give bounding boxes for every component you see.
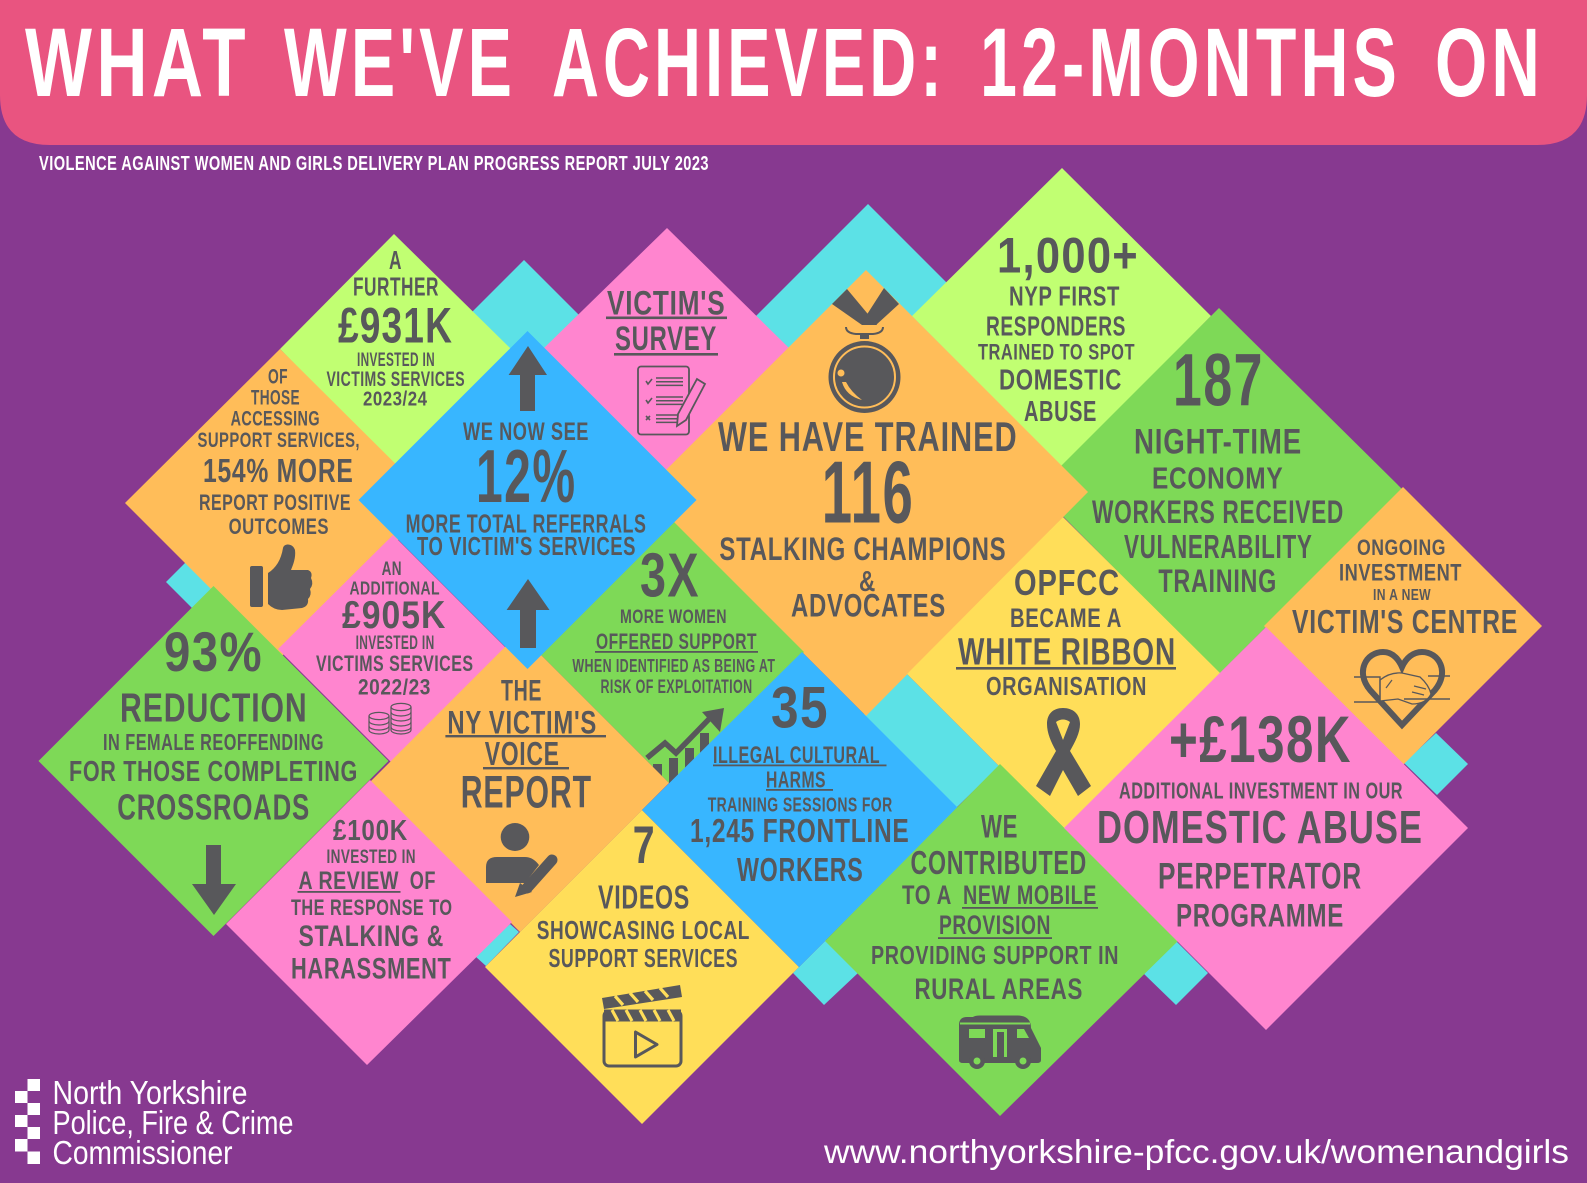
panel: new mobile provision: WE [981, 808, 1018, 844]
panel: 3X more women offered support [540, 521, 804, 788]
panel: 187 night-time economy workers: TRAINING [1158, 563, 1277, 599]
panel: 187 night-time economy workers: 187 [1173, 339, 1264, 422]
panel: 12% more total referrals: 12% [476, 434, 576, 518]
icon: rising chart [647, 708, 724, 788]
panel: new victim's centre: INVESTMENT [1339, 560, 1462, 587]
panel: new mobile provision: PROVISION [939, 910, 1051, 940]
icon: campervan [959, 1016, 1041, 1069]
panel: 1,000+ first responders: RESPONDERS [986, 311, 1126, 342]
panel: 116 stalking champions: & [859, 566, 876, 598]
panel: 100K stalking review: OF [410, 867, 436, 895]
icon: clipboard survey [638, 366, 705, 434]
panel: +138K domestic abuse programme [1064, 627, 1468, 1030]
logo: North Yorkshire PFCC [15, 1074, 294, 1171]
icon: awareness ribbon [1036, 708, 1091, 796]
panel: 12% more total referrals: MORE TOTAL REFERRALS [406, 509, 646, 539]
panel: further 931K investment: INVESTED IN [357, 350, 435, 371]
panel: NY victim's voice report [370, 633, 669, 932]
panel: 116 stalking champions: ADVOCATES [791, 588, 946, 624]
title banner: 12-MONTHS [980, 8, 1401, 117]
panel: 116 stalking champions: STALKING CHAMPIONS [719, 531, 1006, 567]
panel: 154% more positive outcomes [125, 349, 435, 658]
title banner: WE'VE [284, 8, 516, 117]
panel: further 931K investment: FURTHER [353, 272, 439, 302]
icon: thumbs up [250, 544, 312, 610]
panel: 187 night-time economy workers: NIGHT-TIME [1134, 422, 1302, 462]
icon: medal [828, 288, 900, 413]
panel: 187 night-time economy workers: VULNERABILITY [1124, 528, 1312, 565]
panel: 3X more women offered support: OFFERED SUPPORT [596, 629, 757, 654]
arrow: down [192, 845, 236, 915]
panel: +138K domestic abuse programme: DOMESTIC ABUSE [1097, 801, 1423, 853]
panel: 93% reduction in reoffending [38, 586, 388, 936]
panel: NY victim's voice report: THE [501, 674, 542, 708]
logo: North Yorkshire PFCC: Police, Fire & Crime [52, 1104, 294, 1141]
panel: 187 night-time economy workers [1037, 308, 1403, 674]
panel: 100K stalking review: STALKING & [298, 920, 444, 953]
panel: 3X more women offered support: 3X [640, 542, 700, 610]
panel: further 931K investment: 2023/24 [363, 389, 428, 411]
panel: white ribbon organisation: OPFCC [1014, 562, 1120, 603]
panel: further 931K investment: A [389, 245, 402, 275]
panel: white ribbon organisation: ORGANISATION [986, 671, 1147, 701]
panel: 35 illegal cultural harms: TRAINING SESSIONS FOR [708, 794, 893, 816]
panel: 1,000+ first responders: TRAINED TO SPOT [978, 340, 1135, 365]
panel: 187 night-time economy workers: WORKERS RECEIVED [1092, 494, 1344, 530]
panel: 3X more women offered support: WHEN IDENTIFIED AS BEING AT [572, 655, 775, 676]
panel: white ribbon organisation: BECAME A [1010, 603, 1122, 633]
panel: new mobile provision: CONTRIBUTED [910, 844, 1087, 881]
panel: 7 videos: SHOWCASING LOCAL [537, 915, 750, 945]
panel: +138K domestic abuse programme: PERPETRATOR [1158, 855, 1362, 896]
panel: 905K additional investment: INVESTED IN [356, 633, 435, 654]
panel: NY victim's voice report: REPORT [461, 767, 592, 818]
title banner [0, 0, 1587, 145]
panel: 154% more positive outcomes: THOSE [251, 386, 300, 410]
panel: 100K stalking review [226, 780, 512, 1065]
panel: 1,000+ first responders: DOMESTIC [999, 365, 1122, 397]
panel: 7 videos: SUPPORT SERVICES [548, 943, 738, 973]
panel: 93% reduction in reoffending: IN FEMALE REOFFENDING [103, 729, 324, 755]
panel: 116 stalking champions [644, 270, 1088, 716]
panel: 905K additional investment: ADDITIONAL [350, 577, 440, 598]
panel: new mobile provision: TO A [902, 880, 952, 910]
icon: person writing [486, 823, 552, 897]
panel: 1,000+ first responders: NYP FIRST [1009, 280, 1120, 311]
panel: 35 illegal cultural harms: WORKERS [737, 851, 864, 888]
panel: 7 videos: VIDEOS [598, 878, 690, 915]
panel: 905K additional investment [278, 535, 508, 762]
logo: North Yorkshire PFCC: Commissioner [52, 1134, 233, 1171]
panel: 100K stalking review: HARASSMENT [291, 952, 452, 985]
panel: 35 illegal cultural harms: HARMS [766, 767, 826, 793]
panel: 1,000+ first responders [912, 168, 1211, 467]
panel: white ribbon organisation [907, 517, 1221, 831]
panel: NY victim's voice report: VOICE [485, 735, 560, 772]
panel: 154% more positive outcomes: 154% MORE [203, 452, 354, 489]
panel: 35 illegal cultural harms [642, 652, 958, 967]
cyan background diamonds [166, 204, 1468, 1005]
panel: 35 illegal cultural harms: 1,245 FRONTLINE [690, 812, 910, 849]
panel: 100K stalking review: £100K [333, 815, 408, 847]
panel: 93% reduction in reoffending: REDUCTION [120, 684, 308, 730]
panel: 100K stalking review: THE RESPONSE TO [291, 895, 452, 920]
panel: 12% more total referrals [358, 331, 696, 669]
panel: 12% more total referrals: TO VICTIM'S SERVICES [417, 531, 636, 561]
panel: 116 stalking champions: WE HAVE TRAINED [718, 413, 1018, 460]
panel: 93% reduction in reoffending: FOR THOSE COMPLETING [69, 756, 358, 788]
panel: +138K domestic abuse programme: PROGRAMME [1176, 898, 1344, 934]
panel: 35 illegal cultural harms: ILLEGAL CULTURAL [713, 742, 880, 769]
panel: 154% more positive outcomes: OF [268, 366, 288, 388]
panel: 154% more positive outcomes: REPORT POSITIVE [199, 490, 351, 515]
panel: new victim's centre: ONGOING [1357, 535, 1446, 560]
panel: 154% more positive outcomes: ACCESSING [231, 408, 320, 430]
panel: new victim's centre [1264, 487, 1542, 765]
panel: 187 night-time economy workers: ECONOMY [1152, 461, 1283, 496]
panel: 35 illegal cultural harms: 35 [771, 676, 829, 741]
panel: 3X more women offered support: MORE WOMEN [620, 607, 727, 628]
panel: 3X more women offered support: RISK OF EXPLOITATION [600, 677, 752, 698]
panel: 905K additional investment: VICTIMS SERVICES [316, 651, 474, 676]
panel: victim's survey: VICTIM'S [607, 285, 726, 323]
panel: 93% reduction in reoffending: 93% [164, 620, 263, 683]
panel: 154% more positive outcomes: SUPPORT SERVICES, [198, 429, 360, 452]
panel: new mobile provision: RURAL AREAS [914, 973, 1083, 1006]
panel: white ribbon organisation: WHITE RIBBON [958, 632, 1176, 674]
icon: heart and handshake [1354, 652, 1450, 725]
panel: 1,000+ first responders: 1,000+ [997, 228, 1139, 284]
panel: NY victim's voice report: NY VICTIM'S [447, 704, 597, 740]
panel: new mobile provision: PROVIDING SUPPORT IN [871, 940, 1119, 970]
panel: new victim's centre: IN A NEW [1373, 587, 1431, 604]
title banner: ACHIEVED: [552, 8, 946, 117]
panel: 12% more total referrals: WE NOW SEE [463, 418, 589, 446]
panel: 93% reduction in reoffending: CROSSROADS [117, 786, 310, 828]
panel: victim's survey [544, 228, 789, 471]
arrow: up top [509, 346, 547, 411]
arrow: up bottom [507, 579, 550, 648]
panel: new mobile provision: NEW MOBILE [963, 880, 1097, 910]
panel: victim's survey: SURVEY [615, 320, 717, 358]
panel: 905K additional investment: AN [382, 559, 402, 580]
panel: 116 stalking champions: 116 [822, 442, 914, 541]
panel: 905K additional investment: 2022/23 [358, 675, 431, 700]
panel: +138K domestic abuse programme: ADDITIONAL INVESTMENT IN OUR [1119, 778, 1403, 804]
panel: 100K stalking review: INVESTED IN [326, 847, 416, 868]
panel: further 931K investment: £931K [338, 298, 453, 354]
title banner: WHAT [25, 8, 250, 117]
panel: new mobile provision [825, 764, 1178, 1116]
panel: 1,000+ first responders: ABUSE [1024, 396, 1097, 428]
panel: 905K additional investment: £905K [342, 594, 446, 637]
logo: North Yorkshire PFCC: North Yorkshire [52, 1074, 248, 1111]
panel: 100K stalking review: A REVIEW [298, 867, 399, 895]
website URL: www.northyorkshire-pfcc.gov.uk/womenandgirls [823, 1133, 1569, 1170]
panel: further 931K investment: VICTIMS SERVICES [326, 368, 465, 391]
panel: 154% more positive outcomes: OUTCOMES [229, 514, 329, 539]
icon: coin stacks [369, 703, 411, 734]
subtitle: VIOLENCE AGAINST WOMEN AND GIRLS DELIVERY PLAN PROGRESS REPORT JULY 2023 [39, 152, 709, 175]
icon: film clapperboard [602, 985, 682, 1066]
panel: further 931K investment [280, 234, 511, 466]
panel: 7 videos [485, 810, 799, 1124]
panel: +138K domestic abuse programme: +£138K [1169, 702, 1352, 776]
panel: new victim's centre: VICTIM'S CENTRE [1292, 603, 1518, 640]
panel: 7 videos: 7 [633, 816, 656, 875]
